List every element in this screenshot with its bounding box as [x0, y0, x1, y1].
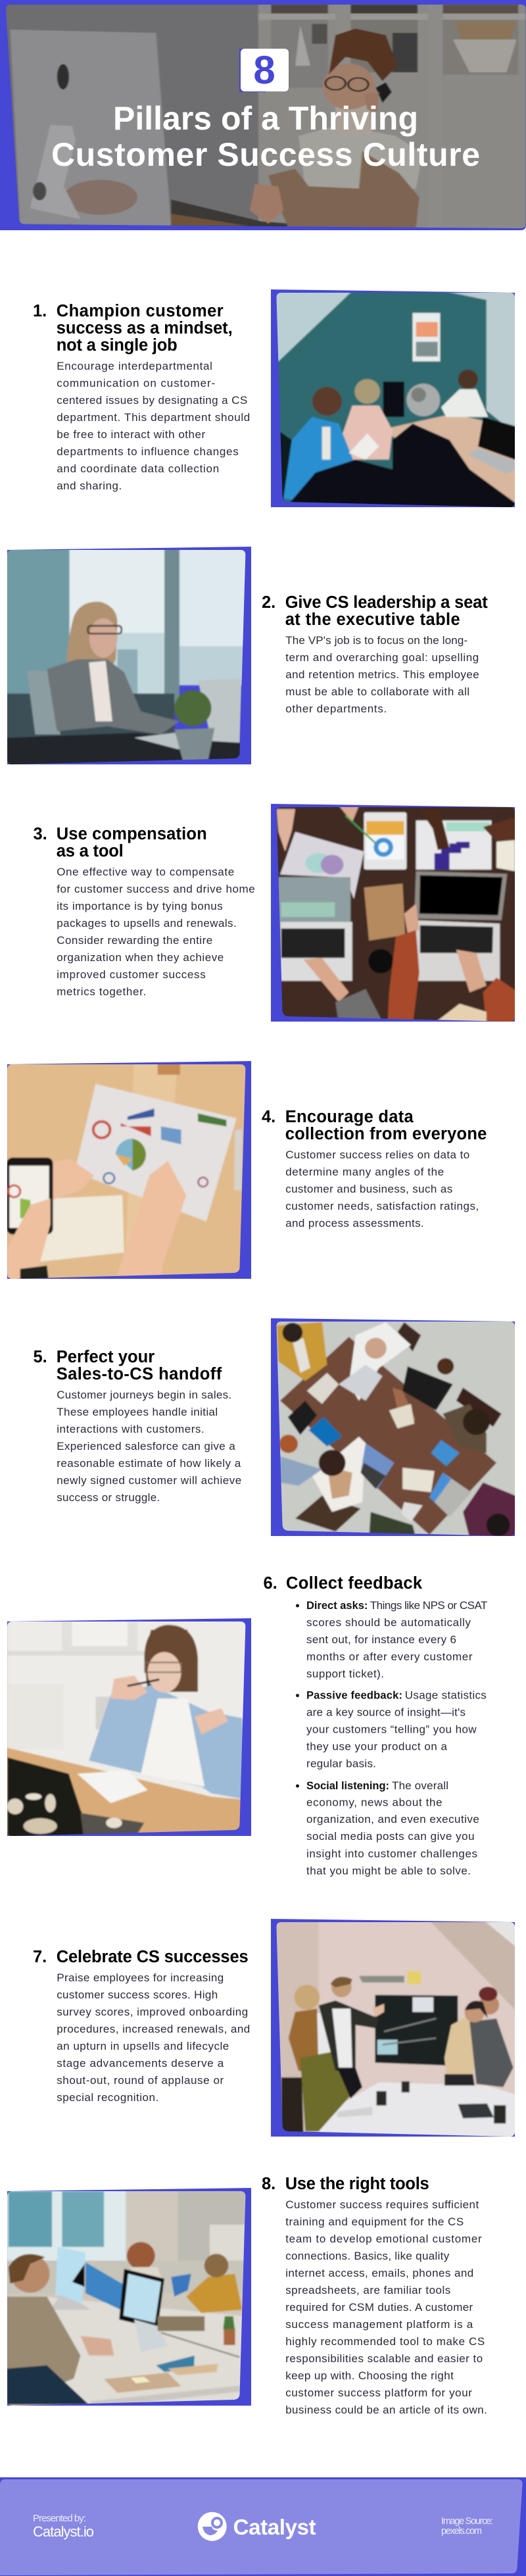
body 3: for customer success and drive home: [57, 883, 255, 895]
body 8: [285, 2198, 487, 2416]
body 1: Encourage interdepartmental: [57, 360, 212, 372]
heading 5: [33, 1348, 222, 1383]
heading 3: as a tool: [57, 842, 124, 860]
body 8: connections. Basics, like quality: [285, 2250, 450, 2262]
body 8: team to develop emotional customer: [285, 2233, 482, 2245]
heading 2: Give CS leadership a seat: [285, 593, 488, 612]
body 3: [57, 866, 255, 998]
body 7: stage advancements deserve a: [57, 2057, 224, 2069]
body 2: and retention metrics. This employee: [285, 668, 479, 681]
image source credit: Image Source:: [441, 2516, 493, 2527]
section 4 text: [262, 1108, 487, 1229]
heading 3: 3.: [33, 825, 47, 843]
heading 2: at the executive table: [285, 610, 460, 629]
heading 4: collection from everyone: [285, 1125, 487, 1143]
bullet: social listening: economy, news about the: [306, 1796, 442, 1809]
bullet: passive feedback: Passive feedback:: [306, 1689, 402, 1701]
bullet: direct asks: months or after every customer: [306, 1650, 473, 1663]
photo 1: meeting at a teal wall: [268, 289, 523, 512]
heading 3: [33, 825, 207, 860]
logo: Catalyst: [198, 2512, 316, 2541]
photo 7: team celebrating by a chalkboard: [268, 1917, 523, 2140]
body 8: customer success platform for your: [285, 2387, 472, 2399]
body 4: [285, 1149, 479, 1229]
body 8: responsibilities scalable and easier to: [285, 2352, 483, 2365]
heading 2: [262, 593, 488, 629]
body 1: be free to interact with other: [57, 428, 206, 441]
body 5: Experienced salesforce can give a: [57, 1440, 235, 1452]
photo 4: hands holding a data report and phone: [7, 1059, 251, 1282]
body 1: communication on customer-: [57, 377, 215, 389]
section 5 text: [33, 1348, 241, 1504]
bullet: direct asks: sent out, for instance every 6: [306, 1633, 456, 1646]
body 1: and sharing.: [57, 480, 122, 492]
body 7: [57, 1971, 250, 2104]
body 5: [57, 1389, 241, 1504]
body 7: special recognition.: [57, 2091, 158, 2104]
bullet: social listening: Social listening:: [306, 1780, 389, 1792]
title: Customer Success Culture: [51, 136, 480, 173]
heading 6: Collect feedback: [286, 1574, 423, 1593]
heading 1: 1.: [33, 302, 47, 320]
bullet: social listening: that you might be able to solve.: [306, 1864, 471, 1877]
body 1: and coordinate data collection: [57, 462, 219, 475]
heading 5: Sales-to-CS handoff: [57, 1365, 222, 1383]
body 5: success or struggle.: [57, 1491, 160, 1504]
bullet: social listening: social media posts can give you: [306, 1830, 475, 1843]
photo 8: open office with desktop computers: [7, 2185, 251, 2411]
bullet: social listening: organization, and even executive: [306, 1813, 479, 1825]
body 5: Customer journeys begin in sales.: [57, 1389, 231, 1401]
header banner: [0, 0, 526, 230]
bullet: social listening: The overall: [392, 1779, 448, 1792]
image source credit: pexels.com: [441, 2526, 482, 2537]
body 8: success management platform is a: [285, 2318, 473, 2331]
footer band: [0, 2477, 526, 2576]
heading 5: Perfect your: [57, 1348, 155, 1366]
bullet: passive feedback: are a key source of insight—it's: [306, 1706, 466, 1718]
body 1: department. This department should: [57, 411, 250, 424]
heading 4: 4.: [262, 1108, 275, 1126]
body 2: The VP's job is to focus on the long-: [285, 634, 467, 647]
section 7 text: [33, 1948, 250, 2104]
body 2: other departments.: [285, 703, 387, 715]
body 2: [285, 634, 479, 715]
body 8: business could be an article of its own.: [285, 2404, 487, 2416]
body 5: interactions with customers.: [57, 1423, 204, 1435]
body 5: These employees handle initial: [57, 1406, 218, 1418]
body 4: Customer success relies on data to: [285, 1149, 469, 1161]
body 3: metrics together.: [57, 985, 146, 998]
bullet: passive feedback: Usage statistics: [405, 1689, 487, 1701]
heading 5: 5.: [33, 1348, 47, 1366]
bullet: passive feedback: [296, 1689, 487, 1770]
presented by credit: Catalyst.io: [33, 2523, 94, 2540]
body 3: improved customer success: [57, 968, 206, 981]
bullet: direct asks: support ticket).: [306, 1668, 384, 1680]
bullet: direct asks: Direct asks:: [306, 1600, 368, 1612]
photo 6: young woman thinking at a desk: [7, 1617, 251, 1839]
body 8: spreadsheets, are familiar tools: [285, 2284, 450, 2296]
presented by credit: Presented by:: [33, 2513, 86, 2524]
body 2: must be able to collaborate with all: [285, 685, 469, 698]
bullet: direct asks: [296, 1599, 487, 1680]
section 6 text: [263, 1574, 487, 1877]
body 7: an upturn in upsells and lifecycle: [57, 2040, 229, 2052]
bullet: social listening: insight into customer challenges: [306, 1847, 477, 1860]
body 8: highly recommended tool to make CS: [285, 2335, 485, 2348]
body 3: packages to upsells and renewals.: [57, 917, 237, 929]
bullet: social listening: [296, 1779, 479, 1877]
body 4: customer and business, such as: [285, 1183, 452, 1195]
heading 4: [262, 1108, 487, 1143]
bullet: passive feedback: your customers “telling” you how: [306, 1723, 477, 1735]
body 5: newly signed customer will achieve: [57, 1474, 241, 1487]
body 7: Praise employees for increasing: [57, 1971, 224, 1984]
body 8: required for CSM duties. A customer: [285, 2301, 473, 2314]
body 5: reasonable estimate of how likely a: [57, 1457, 241, 1470]
heading 1: Champion customer: [57, 302, 224, 320]
body 1: departments to influence changes: [57, 445, 239, 458]
body 8: training and equipment for the CS: [285, 2216, 464, 2228]
heading 1: [33, 302, 233, 355]
bullet: direct asks: Things like NPS or CSAT: [370, 1599, 487, 1612]
heading 7: 7.: [33, 1948, 47, 1966]
presented by credit: [33, 2513, 94, 2540]
body 1: [57, 360, 250, 492]
body 4: determine many angles of the: [285, 1166, 444, 1178]
heading 6: 6.: [263, 1574, 277, 1593]
body 8: keep up with. Choosing the right: [285, 2369, 454, 2382]
heading 4: Encourage data: [285, 1108, 414, 1126]
logo: Catalyst: Catalyst: [233, 2515, 316, 2539]
bullet: passive feedback: regular basis.: [306, 1758, 376, 1770]
bullet: passive feedback: they use your product on a: [306, 1741, 448, 1752]
heading 8: Use the right tools: [285, 2175, 429, 2193]
title: [51, 100, 480, 173]
image source credit: [441, 2516, 493, 2537]
badge: number 8: 8: [253, 48, 275, 92]
body 7: customer success scores. High: [57, 1989, 218, 2001]
body 4: and process assessments.: [285, 1217, 424, 1229]
body 8: internet access, emails, phones and: [285, 2267, 473, 2279]
heading 1: success as a mindset,: [57, 319, 233, 337]
body 7: survey scores, improved onboarding: [57, 2006, 248, 2018]
heading 7: Celebrate CS successes: [57, 1948, 249, 1966]
body 7: shout-out, round of applause or: [57, 2074, 224, 2087]
heading 2: 2.: [262, 593, 275, 612]
bullet: direct asks: scores should be automatically: [306, 1616, 471, 1629]
section 3 text: [33, 825, 255, 998]
body 1: centered issues by designating a CS: [57, 394, 247, 407]
body 4: customer needs, satisfaction ratings,: [285, 1200, 479, 1212]
heading 1: not a single job: [57, 336, 178, 355]
body 7: procedures, increased renewals, and: [57, 2023, 250, 2035]
heading 3: Use compensation: [57, 825, 207, 843]
photo 5: team around a table from above: [268, 1316, 523, 1538]
photo 3: laptops on a wooden table from above: [268, 803, 523, 1025]
photo 2: businesswoman at a window: [7, 545, 251, 767]
body 2: term and overarching goal: upselling: [285, 651, 479, 664]
body 8: Customer success requires sufficient: [285, 2198, 479, 2211]
body 3: Consider rewarding the entire: [57, 934, 212, 947]
body 3: One effective way to compensate: [57, 866, 234, 878]
section 1 text: [33, 302, 250, 492]
body 3: its importance is by tying bonus: [57, 900, 223, 912]
title: Pillars of a Thriving: [113, 100, 418, 137]
section 8 text: [262, 2175, 487, 2416]
hero photo: woman on the phone at a computer: [0, 0, 526, 230]
body 3: organization when they achieve: [57, 951, 224, 964]
heading 8: 8.: [262, 2175, 275, 2193]
badge: number 8: [239, 48, 289, 92]
section 2 text: [262, 593, 488, 715]
